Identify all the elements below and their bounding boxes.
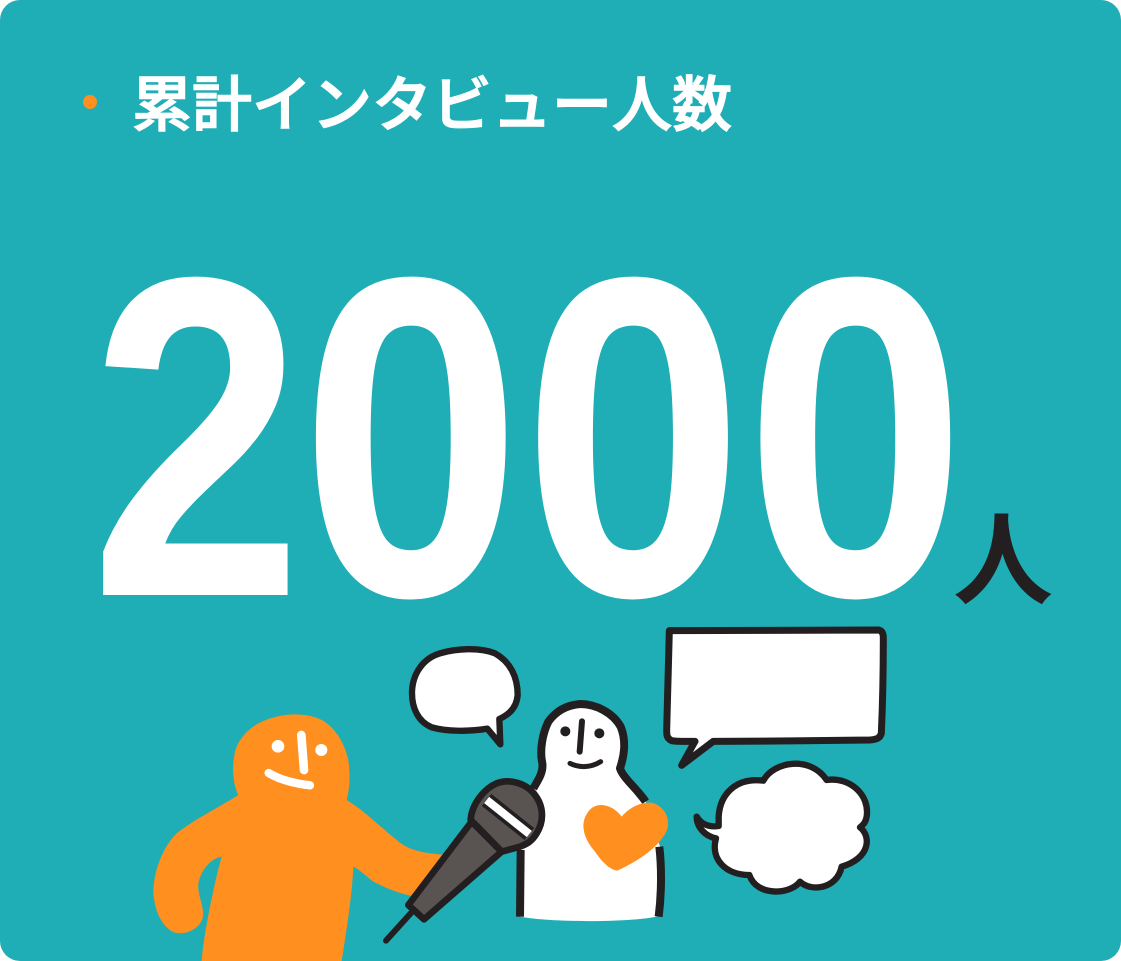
cloud thought bubble: [697, 764, 867, 892]
orange person face: [269, 735, 327, 785]
heading: 累計インタビュー人数: [132, 72, 732, 139]
interviewee face: [560, 721, 604, 767]
white interviewee: [520, 704, 668, 921]
rectangular speech bubble: [667, 630, 883, 765]
small speech bubble: [412, 649, 518, 744]
big number: 2: [90, 184, 303, 692]
illustration: interview scene: [153, 630, 883, 961]
orange interviewer: [153, 714, 447, 961]
unit label: 人: [953, 506, 1053, 618]
bullet dot: [83, 95, 97, 109]
microphone: [386, 781, 542, 941]
big number: 000: [300, 182, 967, 692]
heart: [583, 803, 668, 871]
